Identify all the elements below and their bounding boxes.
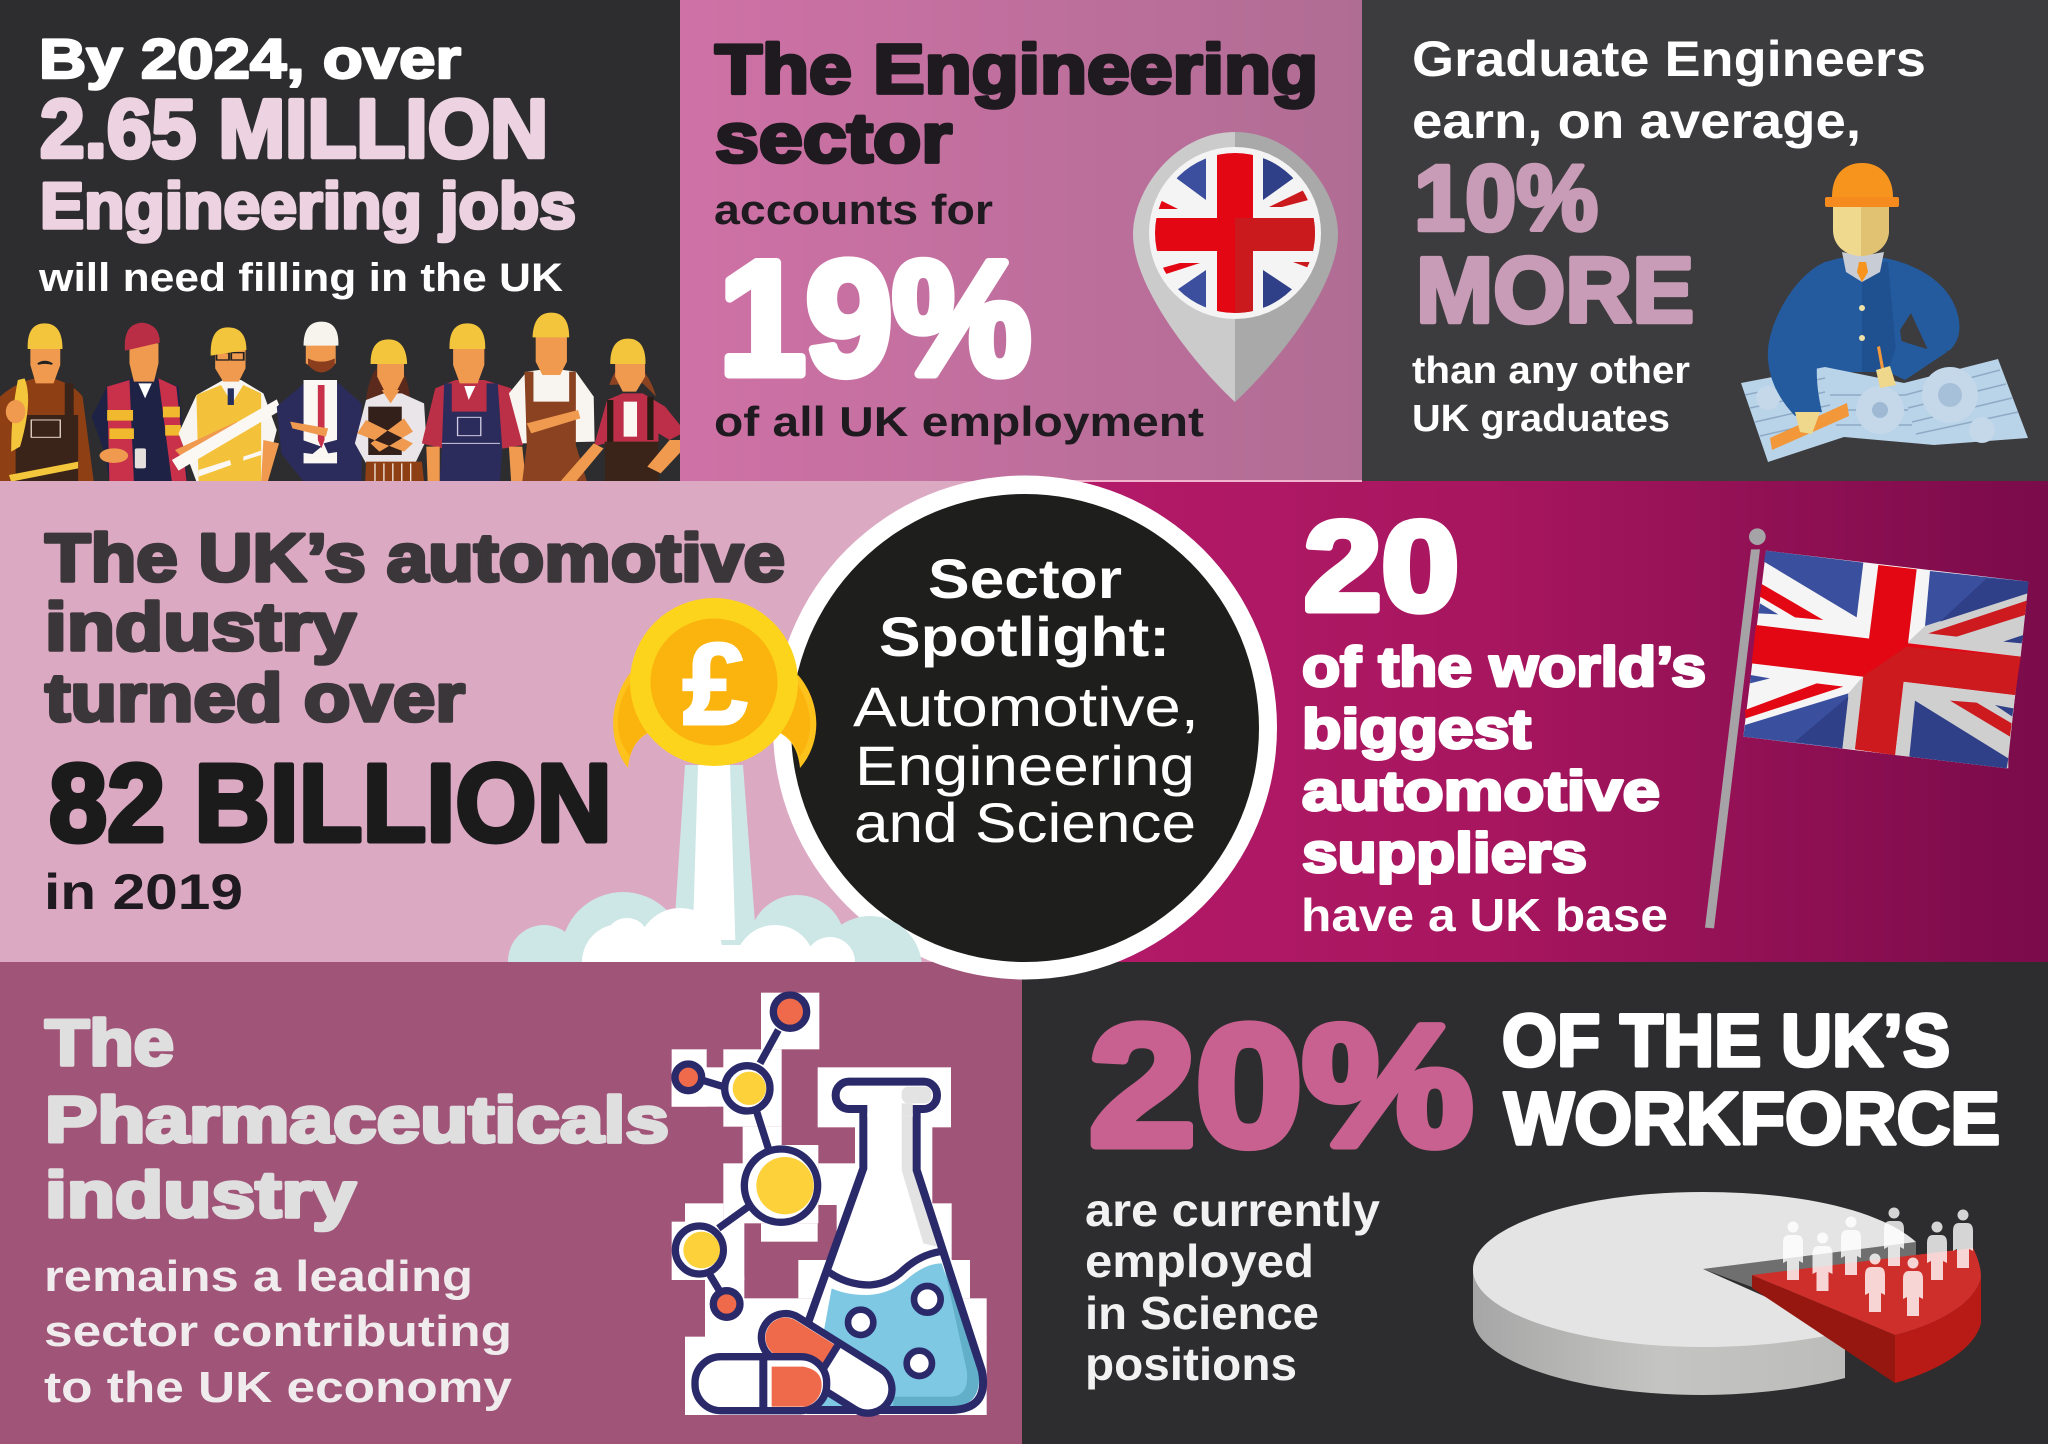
text: than any other UK graduates: UK graduates xyxy=(1412,398,1670,440)
stat: 20: 20 xyxy=(1304,495,1459,637)
text: world's biggest automotive suppliers: suppliers xyxy=(1302,821,1587,884)
text: world's biggest automotive suppliers: of the world’s xyxy=(1302,635,1706,698)
text: world's biggest automotive suppliers: automotive xyxy=(1302,759,1660,822)
centre badge: sector spotlight: Sector xyxy=(928,547,1122,610)
heading: the pharmaceuticals industry: industry xyxy=(45,1158,356,1231)
text: world's biggest automotive suppliers xyxy=(1302,635,1706,884)
worker 5 xyxy=(355,339,426,482)
icon: union flag on pole xyxy=(1705,528,2028,928)
stat: 20%: 20% xyxy=(1089,990,1473,1182)
centre badge: sector spotlight xyxy=(773,476,1277,980)
heading: the engineering sector: sector xyxy=(715,99,952,177)
text: of all UK employment: of all UK employment xyxy=(714,398,1204,445)
heading: by 2024: By 2024, over xyxy=(39,27,461,90)
text: than any other UK graduates xyxy=(1412,350,1690,440)
heading: the pharmaceuticals industry: The xyxy=(45,1006,174,1079)
panel: automotive suppliers xyxy=(1025,480,2048,962)
text: employed in science positions: employed xyxy=(1085,1235,1314,1287)
stat: 82 billion: 82 BILLION xyxy=(49,742,612,865)
panel: graduate engineers earn 10% more xyxy=(1362,0,2048,481)
icon: pound coin rocket with smoke: £ xyxy=(683,619,747,749)
stat: 10% more: MORE xyxy=(1416,238,1694,342)
icon: pound coin rocket with smoke xyxy=(508,598,922,962)
text: remains a leading sector xyxy=(44,1252,513,1412)
centre badge: sector spotlight: and Science xyxy=(854,791,1196,854)
text: have a UK base: have a UK base xyxy=(1301,889,1668,941)
stat: 19%: 19% xyxy=(719,228,1031,409)
centre badge: sector spotlight: Spotlight: xyxy=(879,605,1170,668)
heading: of the UK's workforce: OF THE UK’S xyxy=(1502,999,1950,1082)
text: world's biggest automotive suppliers: biggest xyxy=(1302,697,1531,760)
worker 8 xyxy=(560,339,692,482)
text: remains a leading sector: to the UK economy xyxy=(44,1363,513,1412)
stat: 10% more: 10% xyxy=(1414,146,1598,250)
text: employed in science positions: in Science xyxy=(1085,1287,1319,1339)
worker 4 xyxy=(277,322,362,482)
centre badge: sector spotlight: Automotive, xyxy=(853,675,1199,738)
text: employed in science positions: positions xyxy=(1085,1338,1297,1390)
heading: the engineering sector xyxy=(715,30,1318,177)
text: graduate engineers earn xyxy=(1412,31,1926,149)
worker 6 xyxy=(422,323,526,482)
worker 3 xyxy=(172,327,281,482)
panel: pharmaceuticals xyxy=(0,962,1022,1444)
panel: 2.65 million engineering jobs xyxy=(0,0,692,482)
heading: of the UK's workforce: WORKFORCE xyxy=(1504,1077,2000,1160)
text: graduate engineers earn: Graduate Engineers xyxy=(1412,31,1926,87)
heading: automotive turnover: industry xyxy=(45,589,356,665)
illustration: engineer with blueprint xyxy=(1741,163,2028,462)
heading: automotive turnover: turned over xyxy=(45,660,465,736)
text: employed in science positions xyxy=(1085,1184,1380,1390)
text: in 2019: in 2019 xyxy=(44,864,243,920)
centre badge: sector spotlight: Engineering xyxy=(855,734,1195,797)
heading: the pharmaceuticals industry: Pharmaceuticals xyxy=(45,1083,669,1156)
worker 7 xyxy=(509,313,595,482)
panel: automotive industry 82 billion xyxy=(0,481,1100,962)
text: will need filling: will need filling in the UK xyxy=(38,256,563,300)
panel: 20% of workforce xyxy=(1022,962,2048,1444)
stat: 10% more xyxy=(1414,146,1694,342)
people icons xyxy=(1783,1208,1973,1316)
text: engineering jobs: Engineering jobs xyxy=(40,169,576,242)
worker 2 xyxy=(92,323,187,482)
heading: the pharmaceuticals industry xyxy=(45,1006,669,1231)
heading: automotive turnover xyxy=(45,520,785,736)
text: accounts for: accounts for xyxy=(714,186,993,233)
chart: 3D pie with red 20% slice and people xyxy=(1473,1192,1981,1395)
heading: automotive turnover: The UK’s automotive xyxy=(45,520,785,596)
icon: map pin with union flag xyxy=(1133,132,1338,402)
text: graduate engineers earn: earn, on average, xyxy=(1412,93,1861,149)
panel: engineering sector 19% xyxy=(680,0,1362,481)
heading: the engineering sector: The Engineering xyxy=(715,30,1318,108)
illustration: flask, molecules and pills xyxy=(672,993,987,1422)
stat: 2.65 million: 2.65 MILLION xyxy=(40,82,548,175)
worker 1 xyxy=(0,323,94,482)
illustration: row of eight workers xyxy=(0,313,692,482)
text: employed in science positions: are currently xyxy=(1085,1184,1380,1236)
text: than any other UK graduates: than any other xyxy=(1412,350,1690,392)
text: remains a leading sector: sector contributing xyxy=(44,1307,512,1356)
text: remains a leading sector: remains a leading xyxy=(44,1252,473,1301)
heading: of the UK's workforce xyxy=(1502,999,2000,1160)
